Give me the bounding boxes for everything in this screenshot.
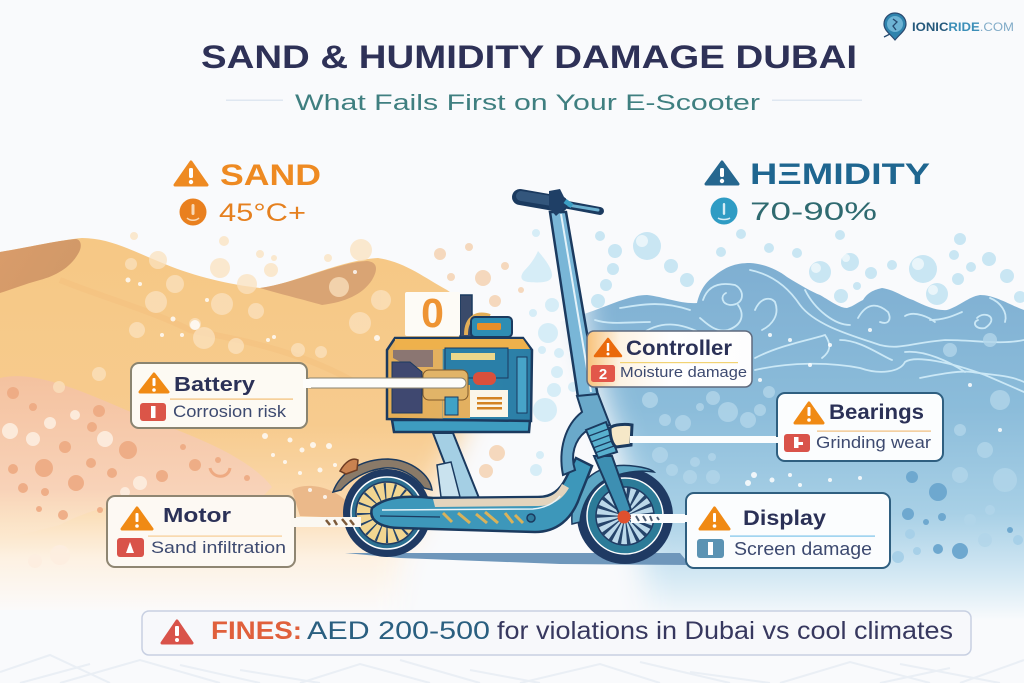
- motor badge: [117, 538, 144, 557]
- battery name: Battery: [174, 374, 256, 396]
- front wheel: [577, 468, 673, 564]
- subtitle rule right: [772, 100, 862, 101]
- controller badge: [591, 365, 615, 383]
- rear fender: [333, 459, 432, 492]
- water bubbles: [521, 229, 1024, 563]
- bearings warning icon: [795, 403, 823, 423]
- battery base: [392, 420, 530, 432]
- panel: humidity water waves: [560, 263, 1024, 620]
- bottom crackle pattern: [0, 655, 1024, 683]
- battery warning icon: [140, 374, 168, 392]
- motor connector: [293, 517, 361, 527]
- fines amount: AED 200-500: [307, 617, 490, 645]
- battery top latch: [460, 295, 512, 337]
- sand bubbles: [2, 232, 524, 568]
- battery number card: 0: [421, 290, 444, 336]
- icon: fines warning: [162, 621, 192, 643]
- icon: temperature: [180, 198, 206, 226]
- title: SAND & HUMIDITY DAMAGE DUBAI: [201, 39, 857, 75]
- panel: sand dunes: [0, 238, 481, 596]
- battery risk: Corrosion risk: [173, 402, 287, 421]
- controller warning icon: [595, 339, 621, 356]
- headlight: [610, 424, 632, 447]
- controller name: Controller: [626, 337, 732, 360]
- bearings risk: Grinding wear: [816, 433, 931, 452]
- display risk: Screen damage: [734, 539, 872, 559]
- display connector: [631, 514, 689, 523]
- scooter illustration: [333, 189, 673, 564]
- battery connector: [305, 378, 466, 388]
- battery unit: [387, 295, 532, 432]
- lower steering column: [561, 394, 610, 475]
- fines banner: [142, 611, 971, 655]
- controller risk: Moisture damage: [620, 364, 747, 381]
- controller card: [587, 331, 752, 387]
- logo: IonicRide.com: [884, 13, 1014, 40]
- suspension spring: [586, 422, 617, 458]
- display name: Display: [743, 507, 826, 530]
- seat post: [433, 433, 479, 498]
- handlebar: [520, 189, 600, 216]
- bearings badge: [784, 434, 810, 452]
- logo wordmark: IONIC RIDE.COM: [912, 20, 1014, 34]
- battery card: [131, 363, 307, 428]
- front fork: [594, 456, 631, 516]
- rear wheel: [343, 469, 431, 557]
- bearings card: [777, 393, 943, 461]
- icon: humidity warning triangle: [706, 162, 738, 184]
- battery badge: [140, 403, 166, 421]
- bearings name: Bearings: [829, 401, 924, 424]
- sand heading: SAND: [220, 159, 321, 192]
- battery case: [387, 338, 532, 421]
- motor name: Motor: [163, 505, 231, 527]
- callout: display: [631, 493, 890, 568]
- ground shadow: [345, 553, 690, 565]
- sand header: [175, 159, 321, 227]
- display card: [686, 493, 890, 568]
- front fender: [572, 465, 654, 524]
- fines label: FINES:: [211, 617, 302, 645]
- subtitle rule left: [226, 100, 283, 101]
- callout: controller: [587, 331, 752, 387]
- subtitle: What Fails First on Your E-Scooter: [295, 90, 760, 115]
- stem: [550, 212, 598, 397]
- display warning icon: [700, 508, 729, 529]
- tail light: [340, 459, 358, 474]
- display badge: [697, 539, 724, 558]
- front hub: [618, 510, 630, 524]
- bearings connector: [630, 436, 780, 443]
- icon: humidity gauge: [710, 198, 738, 224]
- icon: sand warning triangle: [175, 162, 207, 185]
- humidity value: 70-90%: [750, 198, 877, 226]
- temperature value: 45°C+: [219, 199, 306, 227]
- battery number card: [405, 290, 460, 336]
- callout: motor: [107, 496, 361, 567]
- motor risk: Sand infiltration: [151, 538, 286, 557]
- controller badge: 2: [599, 366, 607, 383]
- wave swirl lines: [595, 270, 1024, 392]
- callout: bearings: [630, 393, 943, 461]
- icon: map pin: [884, 13, 906, 40]
- banner panel: [142, 611, 971, 655]
- motor warning icon: [122, 508, 152, 529]
- motor card: [107, 496, 295, 567]
- callout: battery: [131, 363, 466, 428]
- fines description: for violations in Dubai vs cool climates: [497, 617, 953, 645]
- deck: [371, 458, 592, 532]
- humidity header: [706, 158, 930, 226]
- humidity heading: HΞMIDITY: [750, 158, 930, 191]
